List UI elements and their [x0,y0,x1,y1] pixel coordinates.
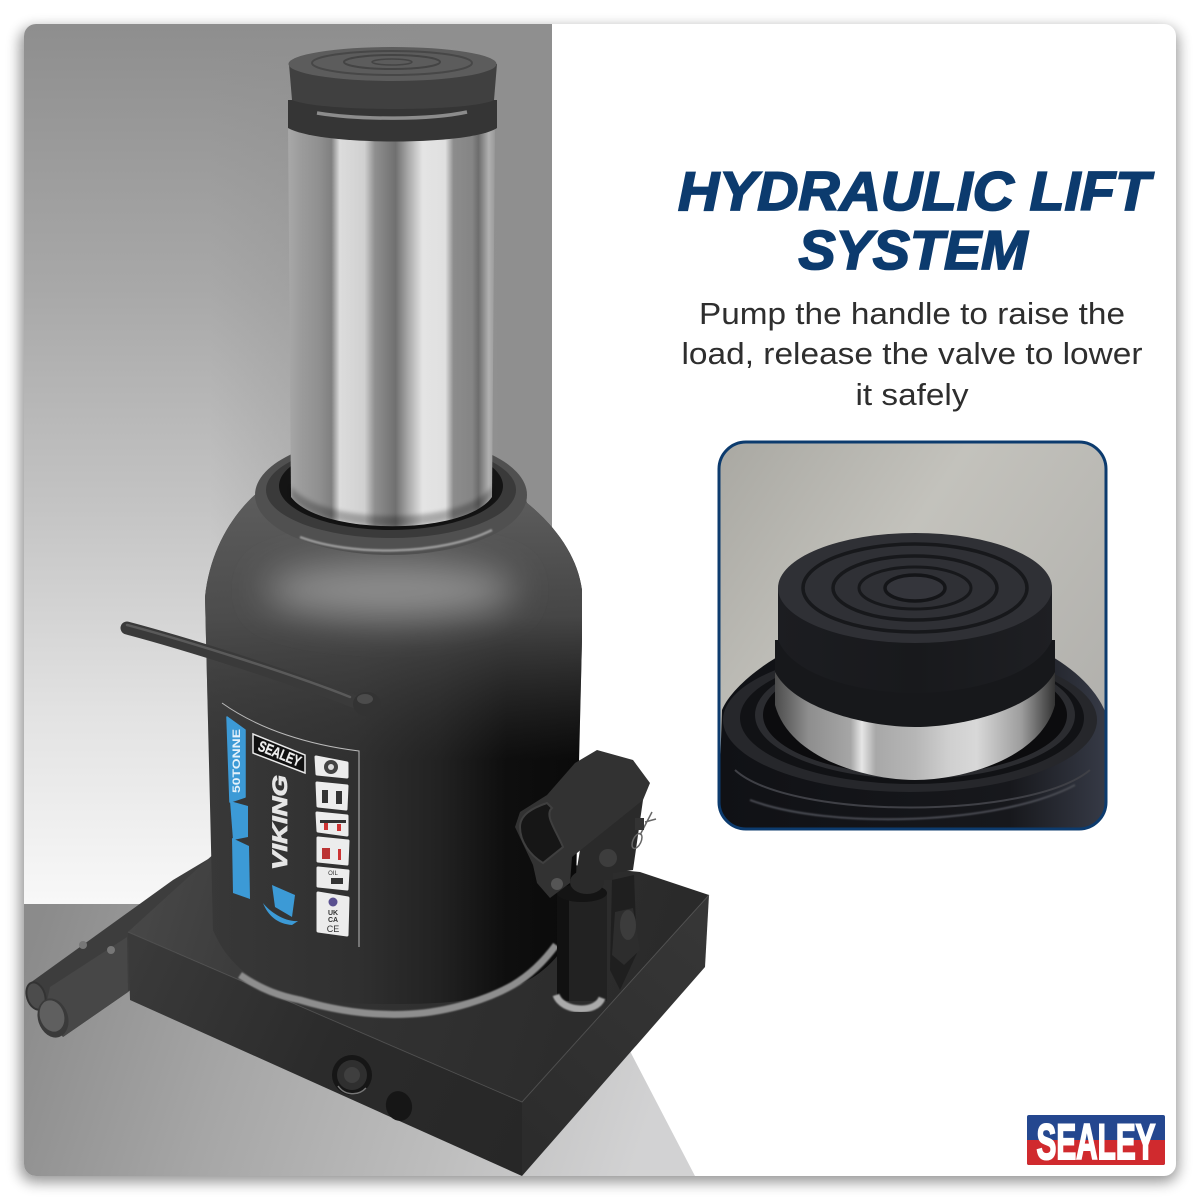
illustration: bottle jack [23,47,709,1176]
description text: Pump the handle to raise the [699,296,1125,331]
handle socket [515,750,656,898]
pump cylinder [556,870,607,1009]
brand badge: SEALEY [256,738,304,771]
split pin [630,812,656,850]
inset photo: ram saddle close-up [718,441,1108,831]
jack body [200,458,590,1004]
safety icons: CA [328,917,338,924]
saddle pad [778,533,1052,643]
saddle band [775,640,1055,727]
pivot bracket [612,908,637,964]
plate hole [386,1091,412,1121]
safety icons: OIL [328,871,338,877]
collar [718,648,1108,830]
jack handle sockets [25,858,209,1038]
icon: viking ship [263,885,298,925]
description text: load, release the valve to lower [682,336,1142,371]
heading: HYDRAULIC LIFT [678,160,1155,222]
brand badge [253,734,305,773]
heading: SYSTEM [798,219,1029,281]
weld bead [240,945,556,1014]
carry handle [127,625,381,716]
logo: SEALEY [1027,1115,1165,1165]
VIKING wordmark: VIKING [269,775,292,870]
heading [678,170,1156,270]
jack collar [255,454,527,555]
studio background [24,24,695,1176]
blue capacity tag [227,717,250,899]
ram top cap [288,47,497,142]
safety icons [316,757,348,935]
base plate [128,830,709,1176]
pump bracket [577,800,643,871]
metal ram [775,660,1055,780]
inset border [719,442,1106,829]
blue capacity tag: 50TONNE [231,729,243,793]
description text: it safely [856,377,969,412]
description text [682,296,1142,412]
safety icons: CE [327,924,339,934]
plate bolt [332,1055,372,1095]
panel: product label [222,703,359,947]
hydraulic pump assembly [515,750,656,1009]
chrome ram [288,120,495,526]
safety icons: UK [328,910,338,917]
